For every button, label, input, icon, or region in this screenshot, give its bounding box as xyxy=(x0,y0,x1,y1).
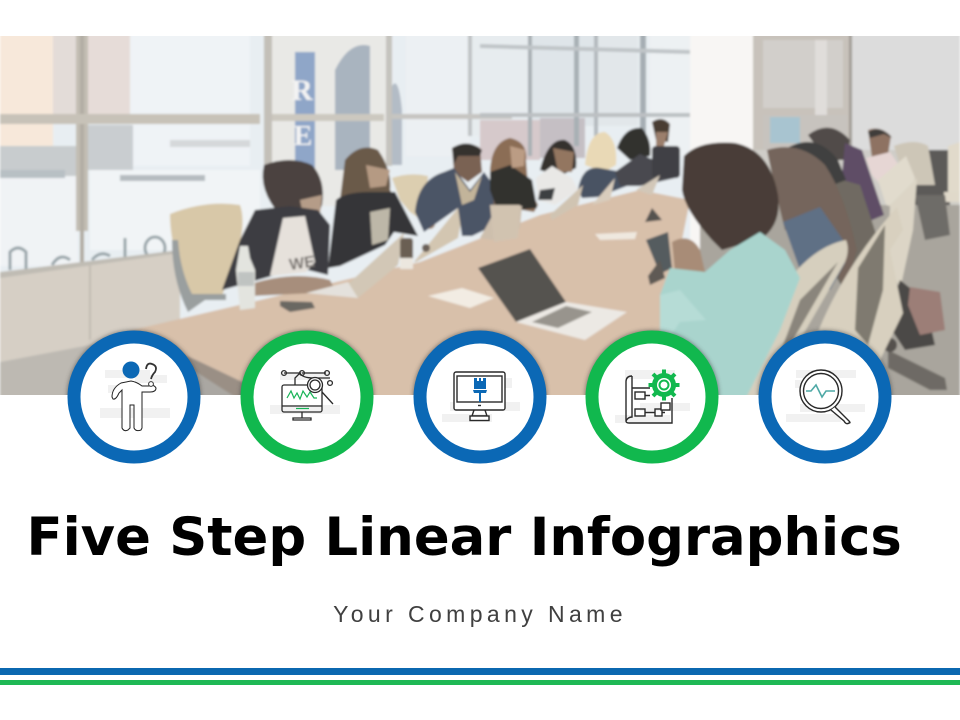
far right desk area and chairs xyxy=(915,150,950,205)
floor xyxy=(700,205,960,400)
wall under window xyxy=(0,252,180,362)
open laptop foreground xyxy=(478,249,566,322)
chair backs on right xyxy=(880,156,915,206)
paper notes xyxy=(428,288,494,308)
tablet xyxy=(646,232,672,274)
building sign and arch xyxy=(272,30,386,206)
footer rule: blue xyxy=(0,668,960,675)
photo: team meeting around a conference table: WE xyxy=(288,253,316,274)
mirrored window lettering xyxy=(10,237,165,270)
person 3: man in navy sweater xyxy=(452,144,482,182)
right side seated people xyxy=(808,128,850,160)
subtitle: company name: Your Company Name xyxy=(333,601,627,627)
person 5: smiling woman, white sweater xyxy=(540,140,576,176)
footer rule: green xyxy=(0,680,960,685)
table xyxy=(128,190,690,400)
bottle xyxy=(236,246,255,310)
laptops left xyxy=(348,233,404,298)
right side of room xyxy=(688,36,752,248)
person 1: curly hair, white tee xyxy=(261,158,324,210)
photo: team meeting around a conference table: R xyxy=(291,74,313,107)
step 5 circle: magnifier with pulse line xyxy=(758,330,892,464)
person 7 and 8: far end xyxy=(617,128,650,160)
back chair xyxy=(170,204,243,296)
photo: team meeting around a conference table xyxy=(0,36,960,464)
person 4: woman in glasses xyxy=(490,138,538,212)
window frames xyxy=(76,30,88,231)
step 2 circle: monitor with chart and magnifier xyxy=(240,330,374,464)
person at far right xyxy=(868,128,891,158)
far laptops xyxy=(488,203,522,218)
person 6: blonde xyxy=(585,132,616,172)
photo: team meeting around a conference table: E xyxy=(294,121,312,152)
person 2: braided hair, black blazer xyxy=(339,146,392,198)
title: Five Step Linear Infographics xyxy=(26,507,902,568)
step 4 circle: blueprint flowchart with gear xyxy=(585,330,719,464)
step 1 circle: person with question mark xyxy=(67,330,201,464)
foreground woman: dark hair, mint jacket xyxy=(682,143,779,250)
window backdrop xyxy=(0,36,692,319)
phone and cups xyxy=(280,301,315,312)
step 3 circle: monitor with paint brush xyxy=(413,330,547,464)
